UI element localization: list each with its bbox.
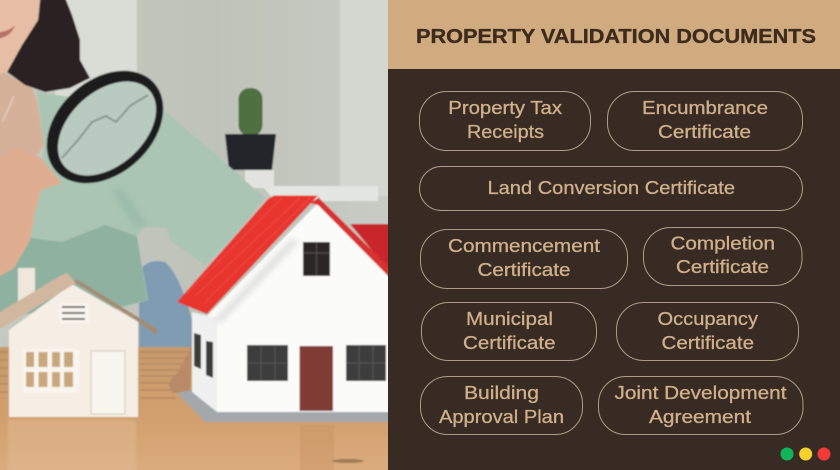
white model house with red roof bbox=[177, 196, 400, 422]
pill: Commencement Certificate: Certificate bbox=[478, 259, 570, 280]
pill: Land Conversion Certificate bbox=[420, 166, 802, 210]
icon: cactus in black pot bbox=[225, 88, 276, 188]
front wall bbox=[207, 203, 400, 412]
panel: documents list background bbox=[388, 0, 840, 470]
chimney bbox=[18, 268, 35, 306]
mint sweater bbox=[0, 92, 265, 314]
pill: Commencement Certificate bbox=[420, 230, 628, 288]
wall background bbox=[0, 0, 400, 360]
photo: woman inspecting model houses with a magnifying glass bbox=[0, 0, 400, 470]
sweater shadow folds bbox=[0, 188, 148, 314]
pill: Encumbrance Certificate: Certificate bbox=[658, 121, 751, 142]
front window right bbox=[346, 345, 386, 381]
gable window bbox=[303, 242, 330, 276]
pill: Land Conversion Certificate: Land Conversion Certificate bbox=[488, 177, 735, 198]
pill: Joint Development Agreement bbox=[598, 376, 803, 434]
face bbox=[0, 0, 41, 76]
roof shadow on wall bbox=[212, 240, 300, 322]
pill: Property Tax Receipts: Property Tax bbox=[448, 97, 563, 118]
side wall bbox=[192, 312, 217, 412]
necklace bbox=[3, 96, 14, 121]
shelf bbox=[262, 186, 378, 201]
skin: neck and chest bbox=[0, 65, 44, 180]
vent bbox=[60, 303, 89, 323]
icon: magnifying glass bbox=[25, 48, 185, 206]
traffic-light dots bbox=[780, 448, 830, 460]
pill: Property Tax Receipts bbox=[420, 92, 590, 150]
roof bbox=[0, 273, 76, 334]
pill: Municipal Certificate bbox=[422, 302, 596, 360]
lips bbox=[0, 25, 15, 39]
pill: Occupancy Certificate bbox=[616, 302, 798, 360]
wooden table bbox=[0, 347, 400, 470]
pill: Joint Development Agreement: Joint Development bbox=[614, 382, 786, 403]
pill: Property Tax Receipts: Receipts bbox=[467, 121, 544, 142]
pill: Encumbrance Certificate: Encumbrance bbox=[642, 97, 768, 118]
window with eight panes bbox=[23, 349, 79, 393]
pill: Municipal Certificate: Certificate bbox=[463, 332, 556, 353]
pill: Joint Development Agreement: Agreement bbox=[649, 406, 751, 427]
red roof bbox=[177, 196, 400, 314]
hair bbox=[7, 0, 90, 92]
pill: Completion Certificate: Certificate bbox=[676, 256, 769, 277]
front door bbox=[300, 346, 333, 411]
pill: Building Approval Plan: Approval Plan bbox=[439, 406, 564, 427]
door bbox=[91, 351, 125, 414]
pill: Occupancy Certificate: Occupancy bbox=[658, 308, 759, 329]
pill: Completion Certificate: Completion bbox=[670, 232, 775, 254]
pill: Building Approval Plan bbox=[420, 376, 582, 434]
title banner bbox=[388, 0, 840, 69]
blue chair bbox=[139, 261, 192, 347]
side windows bbox=[194, 333, 213, 378]
pill: Encumbrance Certificate bbox=[608, 92, 802, 150]
front window left bbox=[247, 345, 288, 381]
walls bbox=[9, 284, 138, 417]
pill: Completion Certificate bbox=[644, 228, 802, 286]
base plate bbox=[177, 390, 400, 422]
pill: Commencement Certificate: Commencement bbox=[448, 235, 600, 256]
pill: Building Approval Plan: Building bbox=[464, 382, 539, 403]
hand holding magnifier bbox=[0, 149, 62, 282]
finger behind house bbox=[168, 346, 192, 393]
pill: Municipal Certificate: Municipal bbox=[466, 308, 553, 329]
title: PROPERTY VALIDATION DOCUMENTS bbox=[416, 26, 816, 48]
pill: Occupancy Certificate: Certificate bbox=[662, 332, 754, 353]
small cream model house bbox=[0, 268, 157, 417]
